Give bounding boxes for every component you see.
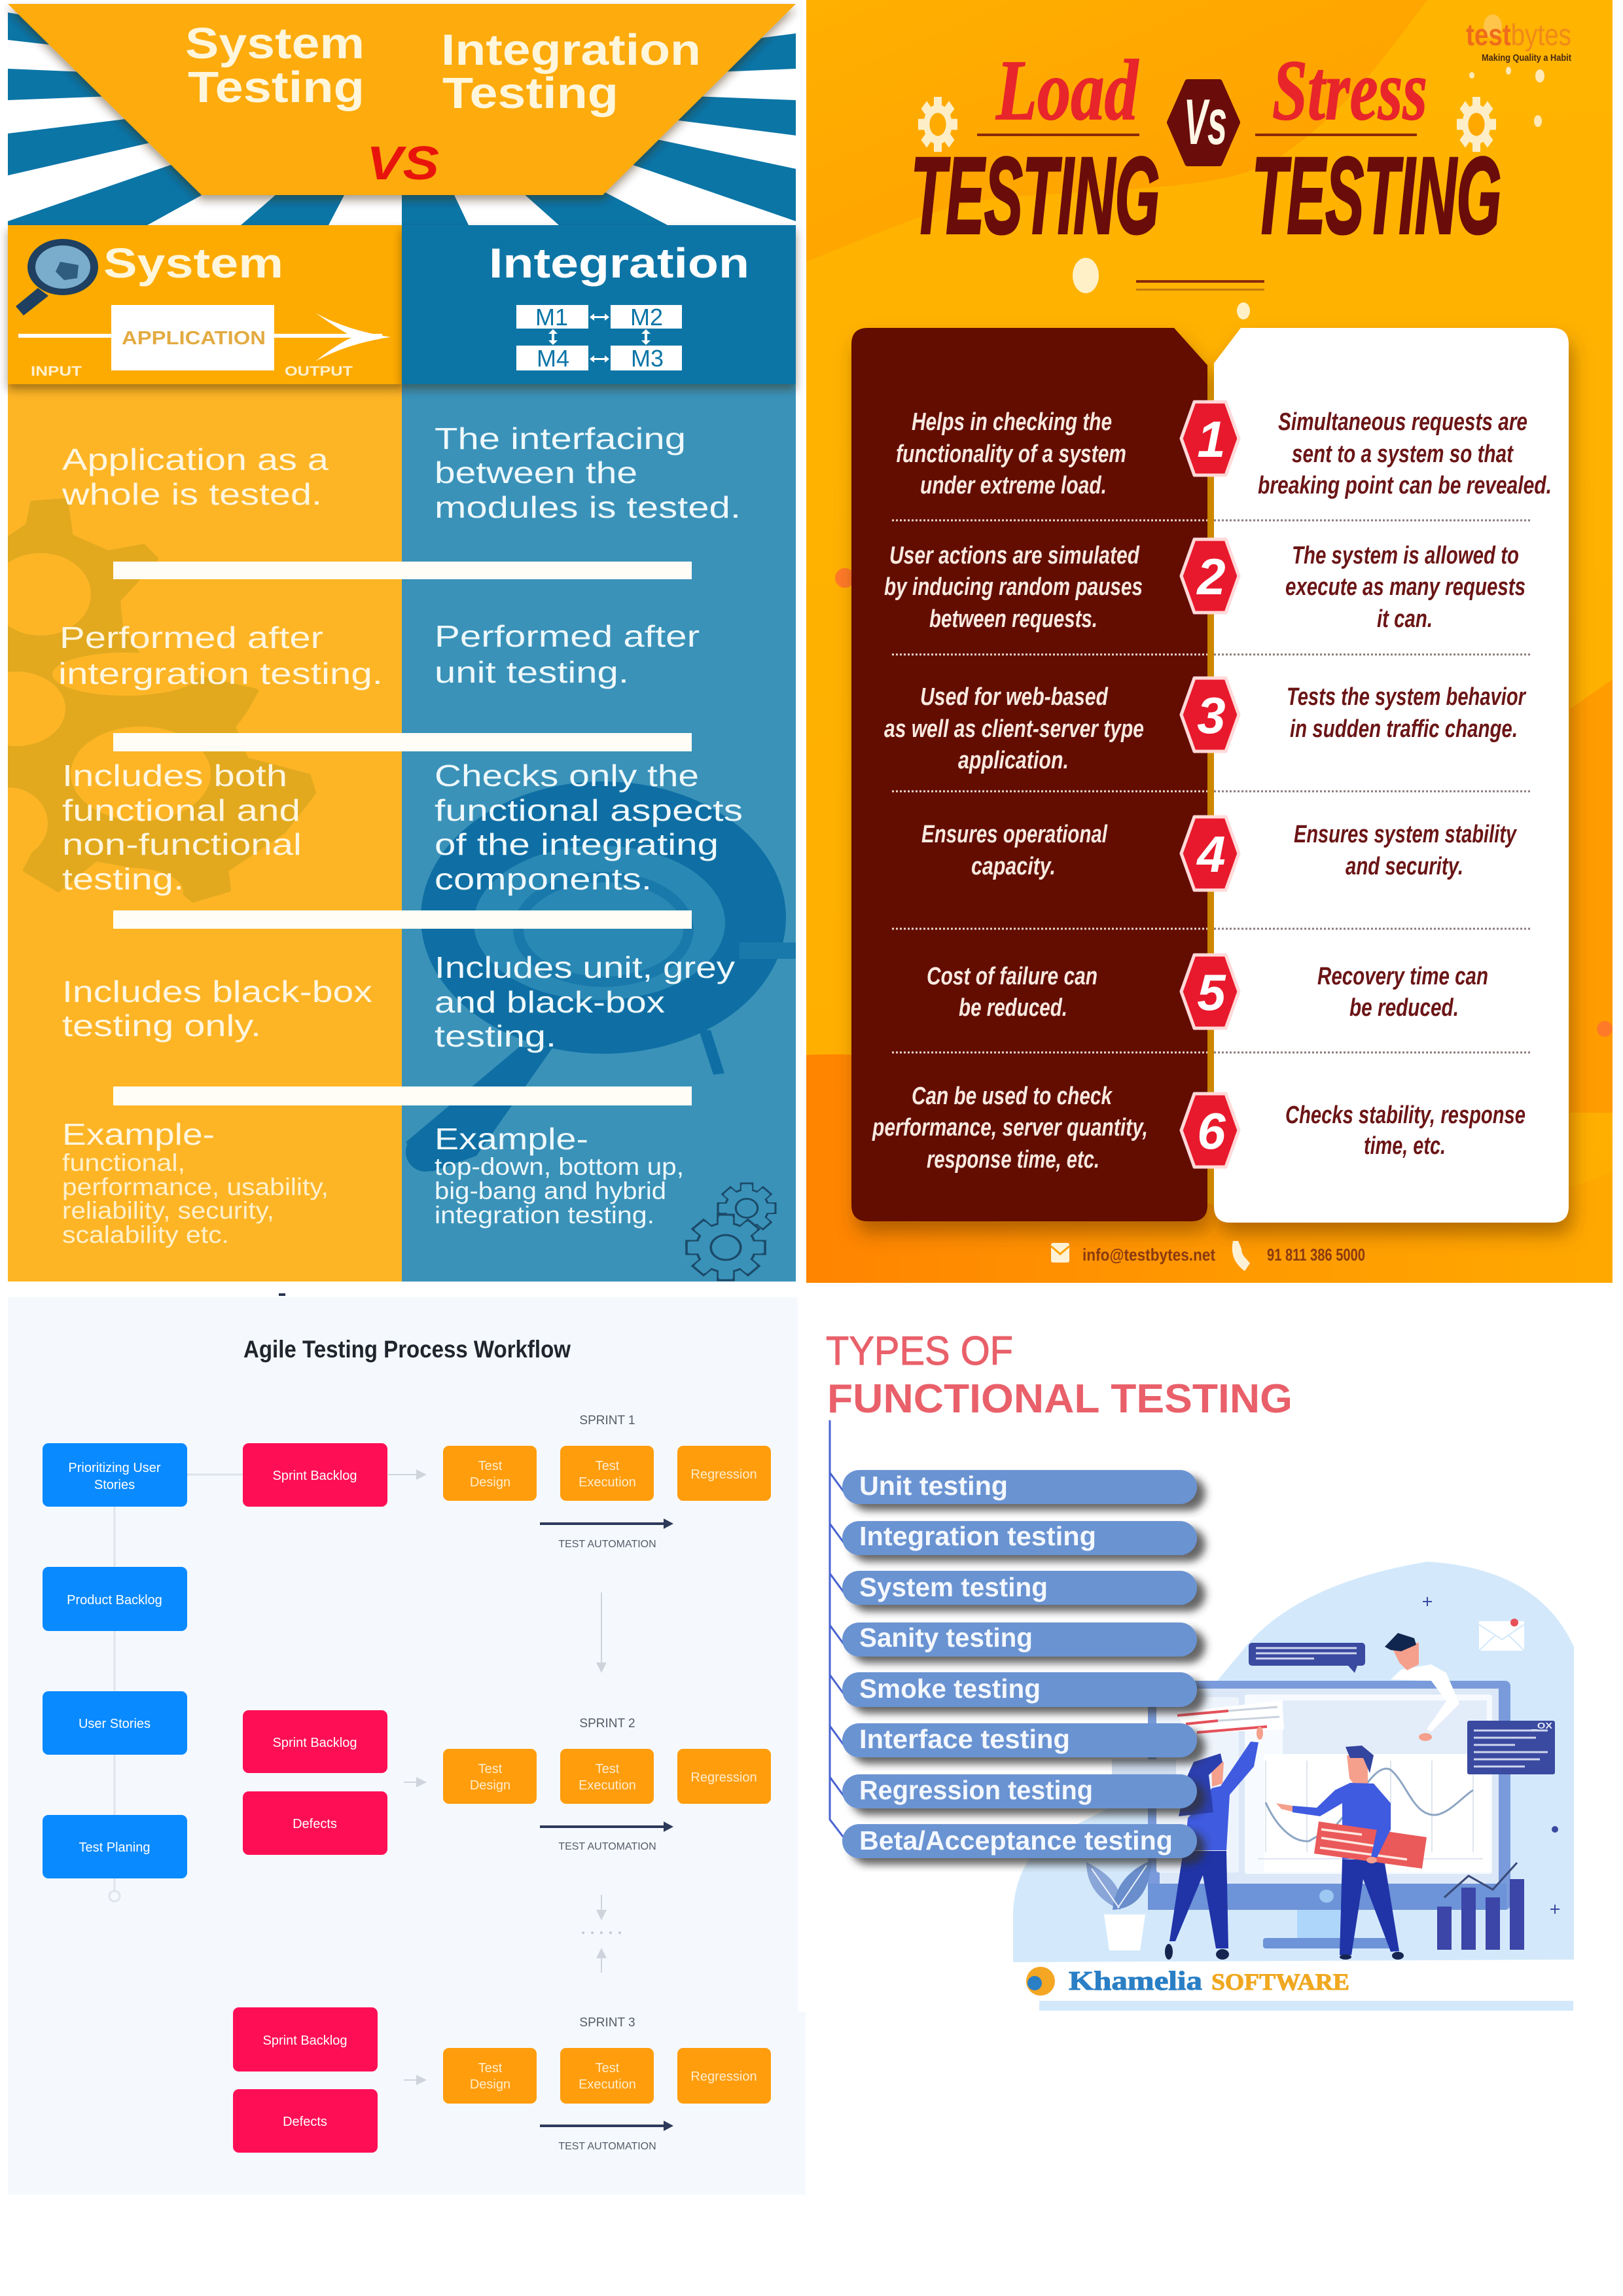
load row 4: [921, 821, 1108, 880]
row 3 integration: functional aspects: [435, 793, 743, 827]
sprint 1: Test: [596, 1459, 620, 1473]
sprint 3: TEST AUTOMATION: [558, 2141, 656, 2152]
stress row 6: Checks stability, response: [1285, 1102, 1525, 1129]
load row 1: functionality of a system: [896, 440, 1126, 468]
logo: testbytes: testbytes: [1466, 18, 1571, 52]
blue stage boxes: Product Backlog: [67, 1593, 162, 1607]
row 4 integration: testing.: [435, 1019, 556, 1053]
blue stage boxes: Stories: [94, 1478, 135, 1492]
small mark: [279, 1293, 285, 1296]
diagram: application input output: OUTPUT: [285, 364, 353, 379]
row 3 integration: of the integrating: [435, 827, 719, 861]
diagram: modules m1 to m4: M1: [535, 304, 568, 331]
load row 4: capacity.: [971, 853, 1056, 880]
stress row 5: be reduced.: [1349, 994, 1459, 1022]
pill: regression testing: [842, 1774, 1197, 1808]
panel: load vs stress testing: [806, 0, 1613, 1283]
illustration: man at top: [1385, 1633, 1459, 1741]
sunburst header background: [8, 4, 796, 225]
load row 6: performance, server quantity,: [872, 1114, 1148, 1141]
illustration: speech bubble: [1249, 1643, 1365, 1673]
load row 5: Cost of failure can: [927, 963, 1097, 990]
row 4 integration: and black-box: [435, 985, 665, 1019]
illustration: woman with card: [1112, 1700, 1284, 1960]
pill: interface testing: Interface testing: [859, 1724, 1070, 1754]
load row 2: between requests.: [929, 605, 1097, 633]
title banner: [8, 4, 796, 195]
sprint 2: Execution: [579, 1778, 636, 1793]
pill: sanity testing: Sanity testing: [859, 1623, 1033, 1653]
diagram: application input output: INPUT: [31, 364, 82, 379]
sprint 1: TEST AUTOMATION: [558, 1539, 656, 1550]
load row 3: Used for web-based: [920, 683, 1109, 711]
load row 2: by inducing random pauses: [884, 573, 1143, 601]
column header: integration: [402, 225, 796, 384]
title: system testing: System: [185, 19, 365, 68]
pill: beta acceptance testing: Beta/Acceptance testing: [859, 1825, 1173, 1856]
column header: system: [8, 225, 402, 384]
row 4 system: [62, 975, 372, 1043]
stress row 4: and security.: [1346, 853, 1463, 880]
pill: regression testing: Regression testing: [859, 1775, 1093, 1805]
row 3 integration: Checks only the: [435, 759, 699, 793]
sprint 1: Regression: [690, 1467, 757, 1482]
title: load testing: [914, 59, 1159, 236]
title: types of functional testing: [826, 1329, 1293, 1422]
pill: system testing: [842, 1571, 1197, 1605]
red backlog boxes: Sprint Backlog: [273, 1469, 357, 1483]
red backlog boxes: [233, 1443, 387, 2153]
row 1 system: Application as a: [62, 442, 329, 476]
footer contact: [1051, 1241, 1365, 1271]
row 5 integration examples: big-bang and hybrid: [435, 1177, 666, 1204]
panel: load testing column: [851, 328, 1207, 1221]
sprint 2: SPRINT 2: [579, 1717, 635, 1731]
sprint 2: [443, 1717, 771, 1852]
sprint 1: Execution: [579, 1475, 636, 1490]
blue stage boxes: User Stories: [79, 1717, 151, 1731]
row 1 integration: modules is tested.: [435, 490, 741, 524]
load row 3: as well as client-server type: [884, 715, 1144, 743]
stress row 2: [1285, 542, 1525, 633]
blue stage boxes: Prioritizing User: [68, 1461, 161, 1475]
row 3 system: [62, 759, 302, 896]
sprint 3: [443, 2016, 771, 2152]
connectors: [109, 1475, 243, 1901]
heading: system: System: [103, 240, 283, 287]
title: Agile Testing Process Workflow: [243, 1336, 571, 1363]
stress row 1: breaking point can be revealed.: [1258, 472, 1552, 499]
stress row 6: time, etc.: [1364, 1132, 1446, 1160]
number badges: 4: [1196, 825, 1226, 883]
sprint 3: Test: [596, 2061, 620, 2075]
load row 6: Can be used to check: [912, 1083, 1113, 1110]
diagram: modules m1 to m4: M4: [537, 345, 569, 372]
pill: smoke testing: [842, 1672, 1197, 1707]
load row 5: [927, 963, 1097, 1022]
title: integration testing: Integration: [441, 26, 701, 75]
illustration: monitor: [1148, 1681, 1510, 1948]
load row 1: Helps in checking the: [912, 408, 1112, 436]
separators: [113, 562, 692, 1105]
load row 5: be reduced.: [959, 994, 1067, 1022]
number badges: [1181, 402, 1239, 1167]
load row 3: application.: [958, 747, 1069, 774]
row 4 integration: Includes unit, grey: [435, 950, 735, 984]
illustration: potted plant: [1086, 1860, 1152, 1950]
row 1 integration: between the: [435, 456, 637, 490]
row 4 integration: [435, 950, 735, 1053]
diagram: application input output: APPLICATION: [122, 328, 266, 349]
sprint 2: Design: [470, 1778, 510, 1793]
pill: unit testing: Unit testing: [859, 1471, 1008, 1501]
pill: smoke testing: Smoke testing: [859, 1674, 1041, 1704]
logo: testbytes: Making Quality a Habit: [1482, 52, 1571, 63]
pill: sanity testing: [842, 1623, 1197, 1657]
sprint 2: Test: [478, 1762, 503, 1776]
row 5 system examples: Example-: [62, 1117, 215, 1151]
background swooshes: [806, 0, 1613, 1283]
sprint 2: Regression: [690, 1770, 757, 1785]
row 2 system: [58, 620, 383, 691]
logo: testbytes: [1466, 24, 1571, 63]
load row 6: response time, etc.: [927, 1146, 1099, 1174]
stress row 1: sent to a system so that: [1292, 440, 1514, 468]
sprint 3: Test: [478, 2061, 503, 2075]
load row 2: User actions are simulated: [889, 542, 1140, 569]
red backlog boxes: Sprint Backlog: [273, 1736, 357, 1750]
pill: integration testing: Integration testing: [859, 1521, 1096, 1551]
panel: types of functional testing: [826, 1329, 1574, 2011]
row 4 system: testing only.: [62, 1009, 261, 1043]
red backlog boxes: Defects: [283, 2115, 327, 2129]
panel: agile testing process workflow: [8, 1293, 806, 2195]
row 5 integration examples: integration testing.: [435, 1202, 654, 1229]
row 5 system examples: performance, usability,: [62, 1174, 329, 1200]
title: types of functional testing: FUNCTIONAL TESTING: [827, 1376, 1293, 1422]
diagram: application input output: [18, 305, 391, 379]
illustration: bar chart: [1437, 1863, 1524, 1950]
sprint 1: Test: [478, 1459, 503, 1473]
load row 3: [884, 683, 1144, 774]
title: stress testing: [1255, 62, 1501, 236]
tree connector lines: [830, 1420, 847, 1842]
sprint 2: Test: [596, 1762, 620, 1776]
title: integration testing: [441, 26, 701, 118]
logo: khamelia software: Khamelia: [1069, 1965, 1202, 1996]
title: system testing: [185, 19, 365, 112]
sprint 1: SPRINT 1: [579, 1414, 635, 1427]
blue stage boxes: Test Planing: [79, 1840, 150, 1855]
footer contact: info@testbytes.net: [1082, 1245, 1215, 1265]
sprint 3: SPRINT 3: [579, 2016, 635, 2030]
row 5 integration examples: [435, 1122, 684, 1229]
illustration: envelope: [1479, 1619, 1524, 1651]
number badges: 1: [1197, 410, 1226, 468]
backdrop sparkles: [1423, 1597, 1560, 1914]
pill: unit testing: [842, 1470, 1197, 1504]
sprint 1: Design: [470, 1475, 510, 1490]
load row 1: under extreme load.: [920, 472, 1107, 499]
pill: interface testing: [842, 1723, 1197, 1757]
number badges: 6: [1197, 1102, 1226, 1160]
row 5 integration examples: top-down, bottom up,: [435, 1153, 684, 1180]
column backgrounds: [0, 384, 796, 1282]
red backlog boxes: Sprint Backlog: [263, 2034, 347, 2048]
icon: mail: [1051, 1243, 1069, 1263]
pill: integration testing: [842, 1521, 1197, 1555]
row 5 system examples: functional,: [62, 1149, 185, 1176]
diagram: modules m1 to m4: M2: [630, 304, 663, 331]
row 5 system examples: scalability etc.: [62, 1221, 229, 1248]
row 2 integration: [435, 619, 700, 689]
stress row 5: Recovery time can: [1317, 963, 1488, 990]
icon: right gear: [1457, 97, 1496, 152]
icon: left gear: [918, 97, 957, 152]
title: system testing: Testing: [188, 63, 365, 112]
row 3 integration: [435, 759, 743, 896]
sprint 3: Design: [470, 2077, 510, 2092]
number badges: 2: [1196, 548, 1226, 605]
stress row 3: Tests the system behavior: [1287, 683, 1527, 711]
stress row 4: Ensures system stability: [1294, 821, 1517, 848]
panel: stress testing column: [1214, 328, 1569, 1223]
decorative dots and lines: [1073, 258, 1264, 319]
stress row 5: [1317, 963, 1488, 1022]
dotted row dividers: [892, 520, 1531, 1052]
row 1 system: [62, 442, 329, 511]
row 2 integration: unit testing.: [435, 655, 629, 689]
title: load testing: TESTING: [911, 135, 1160, 257]
load row 2: [884, 542, 1143, 633]
badge: vs hexagon: [1170, 82, 1237, 163]
sprint 1: [443, 1414, 771, 1550]
red backlog boxes: Defects: [293, 1817, 337, 1831]
row 3 system: non-functional: [62, 827, 302, 861]
diagram: modules m1 to m4: M3: [631, 345, 664, 372]
row 5 system examples: [62, 1117, 329, 1248]
stress row 3: [1287, 683, 1527, 743]
row 3 system: testing.: [62, 862, 184, 896]
stress row 2: it can.: [1377, 605, 1433, 633]
row 2 integration: Performed after: [435, 619, 700, 653]
row 1 integration: The interfacing: [435, 422, 686, 456]
icon: phone: [1232, 1241, 1250, 1271]
row 5 system examples: reliability, security,: [62, 1197, 274, 1224]
load row 4: Ensures operational: [921, 821, 1108, 848]
row 3 system: Includes both: [62, 759, 287, 793]
logo: khamelia software: SOFTWARE: [1211, 1969, 1349, 1995]
panel: system vs integration testing: [0, 4, 796, 1282]
row 1 system: whole is tested.: [62, 477, 322, 511]
stress row 1: [1258, 408, 1552, 499]
logo strip: [1039, 2001, 1573, 2011]
stress row 6: [1285, 1102, 1525, 1160]
row 4 system: Includes black-box: [62, 975, 372, 1009]
row 3 integration: components.: [435, 862, 652, 896]
diagram: modules m1 to m4: [516, 304, 682, 372]
row 2 system: Performed after: [60, 620, 323, 655]
footer contact: 91 811 386 5000: [1267, 1245, 1365, 1265]
illustration backdrop: [1013, 1562, 1574, 1962]
title: load testing: Load: [995, 42, 1139, 138]
vs label: VS: [366, 137, 439, 190]
load row 1: [897, 412, 1126, 493]
stress row 2: The system is allowed to: [1292, 542, 1519, 569]
comparison rows: [58, 422, 743, 1248]
logo: khamelia software: [1026, 1965, 1349, 1996]
title: types of functional testing: TYPES OF: [826, 1329, 1013, 1374]
badge: vs hexagon: Vs: [1184, 86, 1227, 158]
row 2 system: intergration testing.: [58, 656, 383, 691]
icon: outline gears: [687, 1183, 776, 1280]
row 5 integration examples: Example-: [435, 1122, 588, 1156]
testing type pills: [842, 1470, 1197, 1858]
load row 6: [872, 1083, 1148, 1174]
stress row 1: Simultaneous requests are: [1278, 408, 1527, 436]
illustration: man with red card: [1276, 1746, 1427, 1960]
grey flow arrows: [388, 1469, 621, 2085]
illustration: window card: [1467, 1721, 1555, 1774]
row 1 integration: [435, 422, 741, 524]
stress row 3: in sudden traffic change.: [1290, 715, 1518, 743]
stress row 2: execute as many requests: [1285, 573, 1525, 601]
title: integration testing: Testing: [442, 69, 618, 118]
number badges: 3: [1197, 687, 1226, 744]
row 3 system: functional and: [62, 793, 300, 827]
sprint 3: Regression: [690, 2070, 757, 2084]
title: stress testing: Stress: [1272, 42, 1427, 138]
heading: integration: Integration: [489, 240, 749, 287]
stress row 4: [1294, 821, 1517, 880]
illustration: window card: _OX: [1531, 1721, 1552, 1731]
sprint 3: Execution: [579, 2077, 636, 2092]
number badges: 5: [1197, 963, 1226, 1021]
sprint 2: TEST AUTOMATION: [558, 1841, 656, 1852]
blue stage boxes: [43, 1443, 187, 1878]
icon: magnifying glass: [16, 239, 98, 315]
pill: system testing: System testing: [859, 1572, 1048, 1602]
